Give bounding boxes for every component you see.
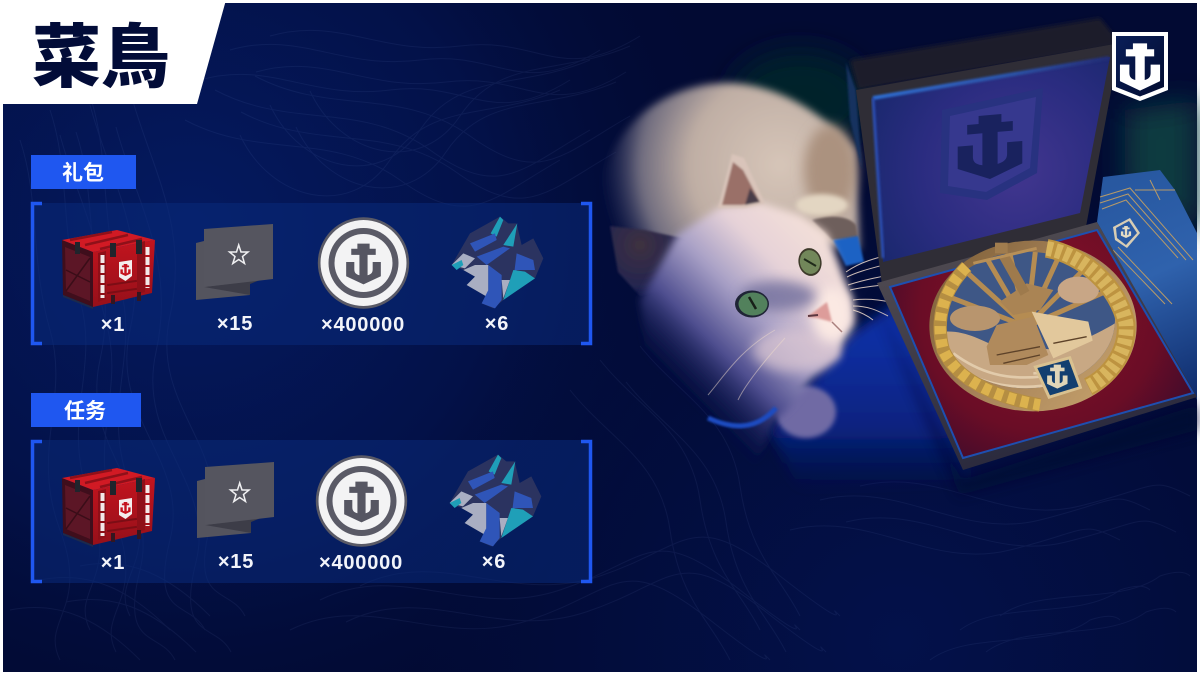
medal palm left xyxy=(940,267,1040,405)
medal ship xyxy=(987,317,1048,365)
medal clouds xyxy=(950,306,1000,331)
quantity labels: ×1 xyxy=(101,314,125,336)
quantity labels: ×15 xyxy=(218,551,254,573)
logo xyxy=(1112,32,1168,101)
illustration: medal box xyxy=(846,18,1197,495)
icon: flags xyxy=(197,462,274,538)
cheek highlight xyxy=(753,328,837,372)
quantity labels: ×15 xyxy=(217,313,253,335)
cat left ear xyxy=(610,226,690,296)
section tag: gift pack xyxy=(31,155,136,189)
lid emblem xyxy=(940,88,1043,200)
icon: red crate xyxy=(62,230,155,309)
quantity labels: ×1 xyxy=(101,552,125,574)
medal waves xyxy=(947,323,1115,388)
panel: gift pack rewards xyxy=(31,203,592,345)
icon: credit coin xyxy=(318,217,409,309)
box lid frame xyxy=(856,43,1120,285)
cat right eye xyxy=(796,246,824,278)
quantity labels: ×400000 xyxy=(319,552,403,574)
cat paw xyxy=(776,386,836,438)
quantity labels: ×6 xyxy=(482,551,506,573)
quantity labels xyxy=(101,551,506,574)
illustration backdrop: dark teal and green behind box xyxy=(730,50,1197,235)
cat top ear xyxy=(718,154,765,208)
box base velvet xyxy=(890,230,1193,458)
cat muzzle highlight xyxy=(812,287,852,343)
cat collar xyxy=(708,408,776,426)
cat head xyxy=(640,203,853,480)
shadow by the eye xyxy=(740,281,816,311)
medal wreath right xyxy=(1047,248,1126,387)
icon: credit coin xyxy=(316,455,407,547)
cat body xyxy=(598,83,860,260)
icon: red crate xyxy=(62,468,155,547)
panel brackets xyxy=(32,204,590,344)
icon: flags xyxy=(196,224,273,300)
quantity labels: ×400000 xyxy=(321,314,405,336)
section tag: missions xyxy=(31,393,141,427)
cream patch xyxy=(796,194,848,216)
title banner xyxy=(0,0,226,104)
section tag: gift pack: 礼包 xyxy=(62,162,104,185)
illustration: cat xyxy=(598,83,975,490)
blue stripe cushion by the whiskers xyxy=(833,236,864,266)
icon: wolf camouflage xyxy=(452,217,543,308)
quantity labels xyxy=(101,313,509,336)
panel: mission rewards xyxy=(31,440,592,583)
panel brackets xyxy=(32,442,590,582)
medal xyxy=(929,240,1137,411)
box lid inner xyxy=(873,57,1110,262)
cat left eye xyxy=(735,290,769,318)
cat body tan flank xyxy=(804,125,856,215)
quantity labels: ×6 xyxy=(485,313,509,335)
cat nose xyxy=(807,302,832,322)
section tag: missions: 任务 xyxy=(64,400,106,423)
box back xyxy=(850,18,1122,90)
icon: wolf camouflage xyxy=(450,455,541,546)
box base frame xyxy=(877,222,1197,470)
brown patch xyxy=(812,217,858,240)
illustration: pillow xyxy=(1097,170,1197,400)
medal rays xyxy=(952,252,1104,325)
blue cushion beside cat xyxy=(770,300,975,490)
box side xyxy=(846,62,862,170)
title text: 菜鳥 xyxy=(32,19,170,96)
medal shield xyxy=(1033,356,1082,399)
pillow emblem xyxy=(1113,218,1140,248)
box shadow xyxy=(870,290,1197,495)
cat whiskers xyxy=(708,252,925,400)
lid rim glow xyxy=(873,58,1109,98)
